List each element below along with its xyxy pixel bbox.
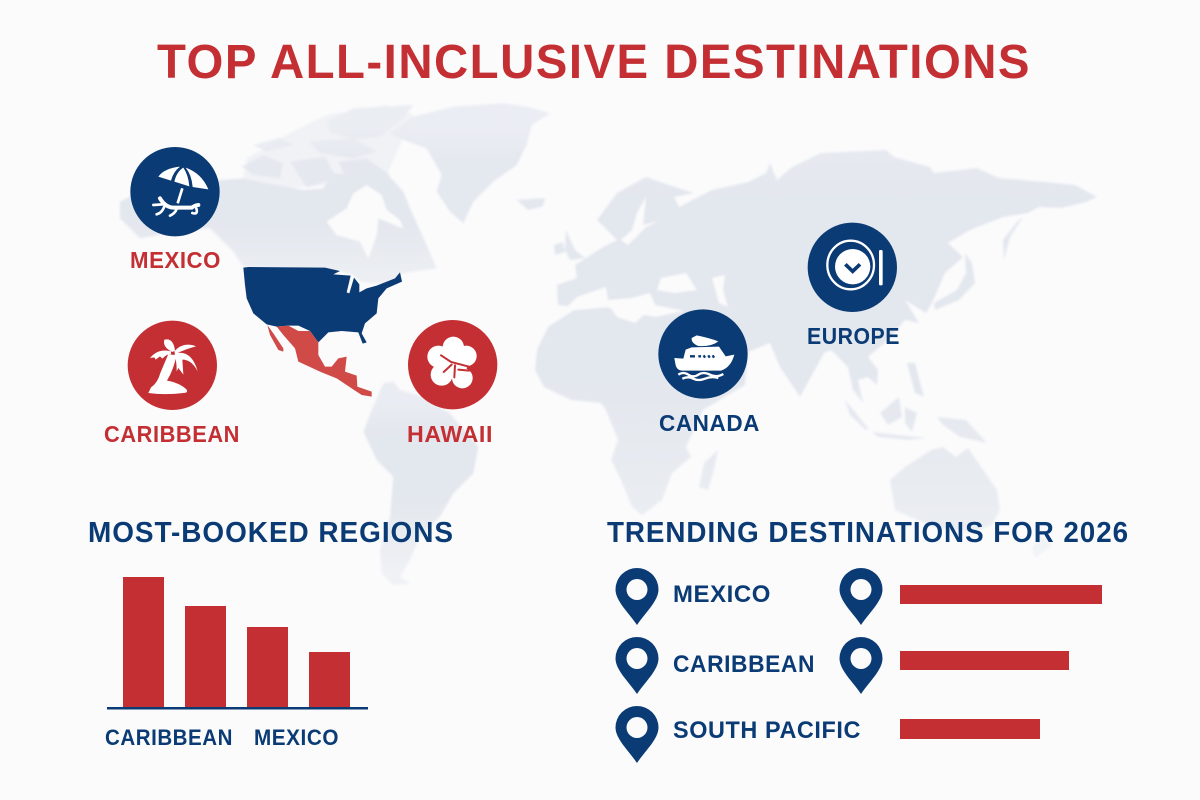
Madagascar xyxy=(699,450,718,490)
Hudson Bay xyxy=(327,185,403,258)
heading: most-booked regions: MOST-BOOKED REGIONS xyxy=(88,517,454,549)
British Isles xyxy=(554,230,585,260)
Caspian Sea xyxy=(712,275,728,307)
arctic haze behind the Canadian islands xyxy=(243,105,413,188)
trending row: South Pacific xyxy=(616,706,1040,763)
icon: dining plate xyxy=(808,223,897,312)
Africa xyxy=(535,307,748,515)
Mediterranean xyxy=(566,287,655,323)
label: Mexico: MEXICO xyxy=(130,247,221,273)
trending row: Caribbean: CARIBBEAN xyxy=(673,651,815,678)
Indonesia and Philippines xyxy=(845,363,987,443)
map highlight: USA and Mexico xyxy=(243,267,402,397)
bar chart: most-booked regions: CARIBBEAN xyxy=(105,725,233,750)
Black Sea xyxy=(657,273,697,293)
Sakhalin and Japan xyxy=(934,217,1023,310)
icon: hibiscus flower xyxy=(408,320,497,409)
Eurasia xyxy=(557,150,1097,403)
South America xyxy=(363,382,478,585)
Baltic Sea xyxy=(621,197,659,245)
title: TOP ALL-INCLUSIVE DESTINATIONS xyxy=(157,36,1031,89)
trending row: South Pacific: SOUTH PACIFIC xyxy=(673,717,861,744)
New Zealand xyxy=(1032,535,1052,558)
USA shape xyxy=(243,267,402,344)
Iceland edge xyxy=(517,198,545,210)
label: Canada: CANADA xyxy=(659,410,760,436)
world map background xyxy=(120,103,1097,585)
label: Hawaii: HAWAII xyxy=(407,421,493,447)
Australia xyxy=(890,447,1000,532)
icon: beach umbrella xyxy=(130,147,220,236)
label: Caribbean: CARIBBEAN xyxy=(104,421,240,447)
icon: cruise ship xyxy=(658,309,748,399)
icon: palm tree xyxy=(128,321,217,410)
trending row: Mexico xyxy=(616,568,1102,625)
bar chart: most-booked regions: MEXICO xyxy=(254,725,339,750)
Mexico and Central America shape xyxy=(267,325,372,397)
trending row: Caribbean xyxy=(616,637,1069,694)
label: Europe: EUROPE xyxy=(807,323,900,349)
trending row: Mexico: MEXICO xyxy=(673,581,771,608)
heading: trending destinations: TRENDING DESTINATIONS FOR 2026 xyxy=(607,517,1129,549)
bar chart: most-booked regions xyxy=(105,577,368,750)
